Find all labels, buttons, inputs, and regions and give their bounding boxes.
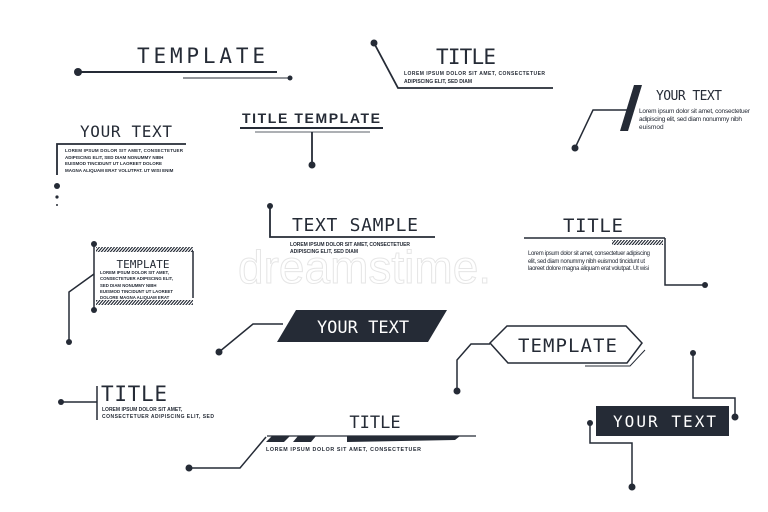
watermark: dreamstime.	[238, 241, 491, 293]
block: template box: DOLORE MAGNA ALIQUAM ERAT	[100, 295, 170, 300]
block: title right middle	[524, 215, 708, 288]
block: your text parallelogram: YOUR TEXT	[317, 318, 409, 338]
block: text sample	[267, 203, 435, 255]
block: title right middle: TITLE	[563, 215, 623, 237]
block: template top-left: TEMPLATE	[137, 44, 265, 68]
block: template hexagon	[454, 326, 645, 394]
block: your text top-right	[572, 85, 751, 152]
block: template box: TEMPLATE	[117, 258, 169, 271]
block: title bottom-left: LOREM IPSUM DOLOR SIT AMET,	[102, 407, 183, 413]
block: your text top-right: YOUR TEXT	[656, 89, 722, 104]
block: template box: CONSECTETUER ADIPISCING ELIT,	[100, 276, 173, 281]
block: text sample: ADIPISCING ELIT, SED DIAM	[290, 249, 358, 255]
block: title right middle: elit, sed diam nonummy nibh euismod tincidunt ut	[528, 259, 645, 265]
block: title top-center: TITLE	[436, 45, 496, 69]
block: template box: EUISMOD TINCIDUNT UT LAOREET	[100, 289, 173, 294]
block: your text left: ADIPISCING ELIT, SED DIAM NONUMMY NIBH	[65, 155, 163, 160]
block: your text dark box	[587, 350, 738, 490]
block: title bottom-left	[58, 382, 214, 420]
block: template box: SED DIAM NONUMMY NIBH	[100, 283, 156, 288]
block: title top-center	[370, 40, 553, 88]
block: template hexagon: TEMPLATE	[518, 335, 617, 357]
block: title bottom-left: CONSECTETUER ADIPISCING ELIT, SED	[102, 414, 214, 420]
block: text sample: LOREM IPSUM DOLOR SIT AMET, CONSECTETUER	[290, 242, 410, 248]
block: title bottom-left: TITLE	[101, 382, 167, 406]
block: template box	[66, 241, 193, 345]
block: your text parallelogram	[216, 310, 447, 356]
block: your text dark box: YOUR TEXT	[613, 412, 716, 431]
block: title top-center: LOREM IPSUM DOLOR SIT AMET, CONSECTETUER	[404, 71, 545, 77]
block: title right middle: Lorem ipsum dolor sit amet, consectetuer adipiscing	[528, 251, 650, 257]
block: title bottom	[186, 413, 476, 472]
block: your text left: EUISMOD TINCIDUNT UT LAOREET DOLORE	[65, 161, 162, 166]
block: title template: TITLE TEMPLATE	[242, 110, 380, 126]
block: your text left: LOREM IPSUM DOLOR SIT AMET, CONSECTETUER	[65, 148, 184, 153]
block: template box: LOREM IPSUM DOLOR SIT AMET,	[100, 270, 169, 275]
block: your text left	[54, 122, 186, 206]
block: template top-left	[74, 44, 292, 80]
block: your text top-right: euismod	[639, 124, 664, 131]
block: title top-center: ADIPISCING ELIT, SED DIAM	[404, 79, 472, 85]
block: title bottom: TITLE	[349, 413, 401, 433]
block: title right middle: laoreet dolore magna aliquam erat volutpat. Ut wisi	[528, 266, 649, 272]
block: text sample: TEXT SAMPLE	[292, 215, 418, 236]
block: title template	[240, 110, 383, 168]
block: your text top-right: adipiscing elit, sed diam nonummy nibh	[639, 116, 742, 123]
block: your text left: YOUR TEXT	[80, 122, 172, 141]
block: your text left: MAGNA ALIQUAM ERAT VOLUTPAT. UT WISI ENIM	[65, 168, 174, 173]
block: title bottom: LOREM IPSUM DOLOR SIT AMET, CONSECTETUER	[266, 447, 421, 453]
block: your text top-right: Lorem ipsum dolor sit amet, consectetuer	[639, 108, 751, 115]
